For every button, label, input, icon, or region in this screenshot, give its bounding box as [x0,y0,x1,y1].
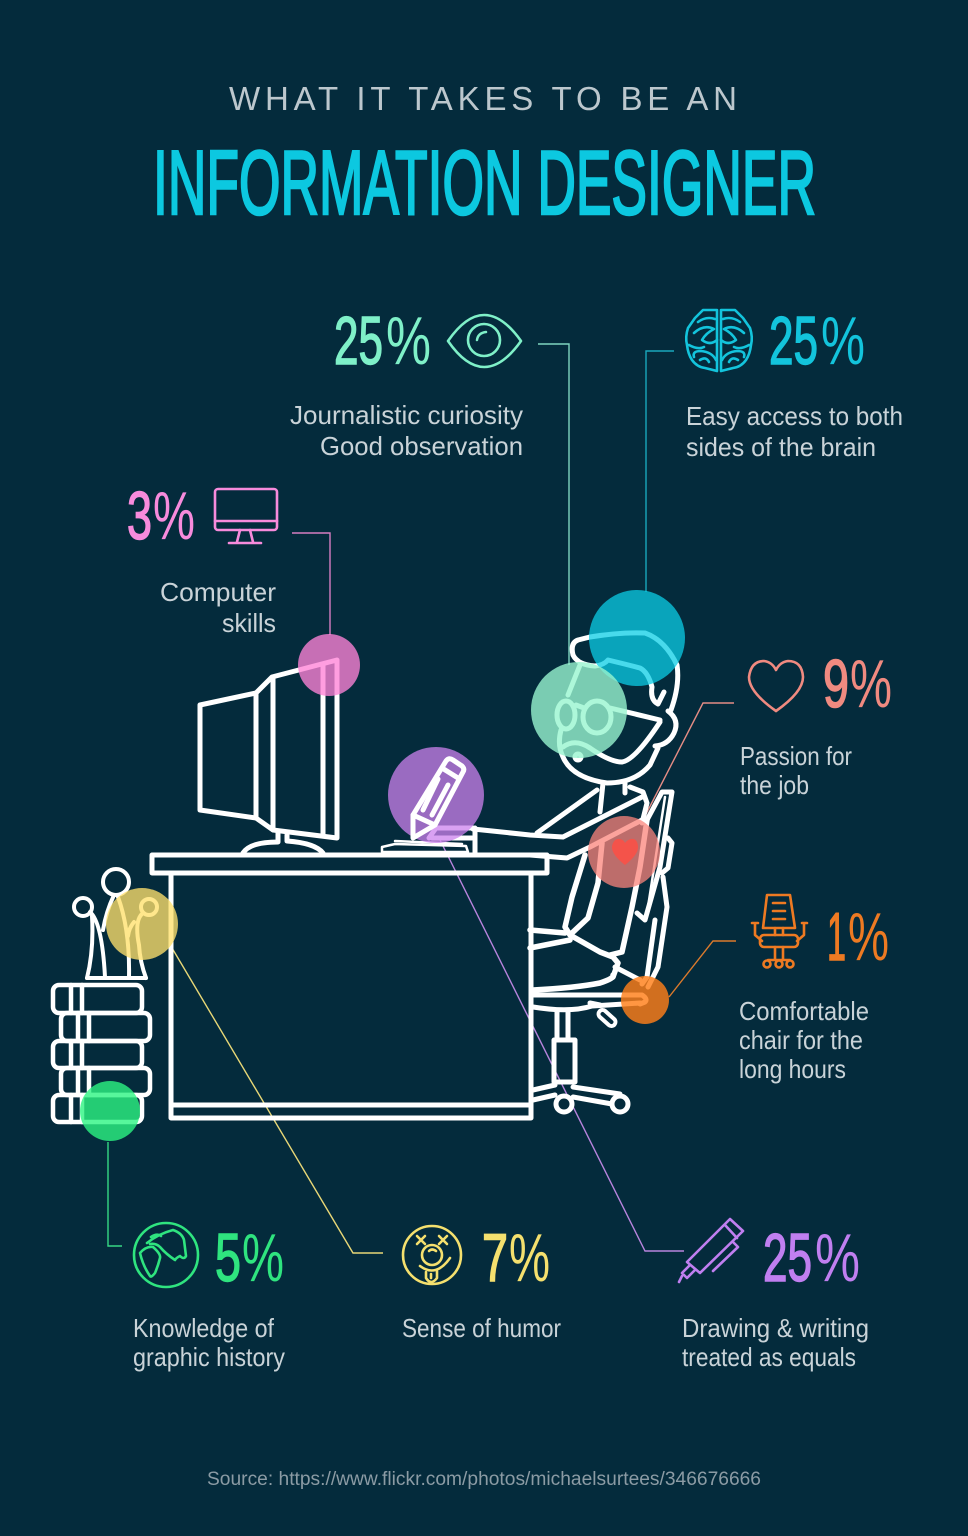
circle: passion [588,816,660,888]
neck [600,783,647,823]
torso [530,820,647,990]
circle: history [80,1081,140,1141]
callout: computer skills: % [153,478,195,554]
callout: graphic history: 5 [215,1220,241,1296]
office chair [533,792,672,1112]
callout: journalistic curiosity: % [386,303,431,379]
hand and arm [429,790,642,858]
icon: red heart [612,839,638,865]
circle: computer [298,634,360,696]
head, hair, glasses [557,633,678,783]
callout: drawing and writing [679,1219,869,1372]
circle: brain [589,590,685,686]
callout: drawing and writing: treated as equals [682,1342,856,1372]
source line: Source: https://www.flickr.com/photos/michaelsurtees/346676666 [207,1469,761,1490]
title line: what it takes: WHAT IT TAKES TO BE AN [229,80,737,117]
callout: computer skills: 3 [127,478,152,554]
icon: eye [448,315,521,367]
callout: graphic history [133,1220,285,1372]
desk [152,855,547,1118]
callout: drawing and writing: 25 [763,1220,812,1296]
callout: both sides of the brain [686,303,903,462]
callout: comfortable chair [739,895,889,1084]
callout: passion for the job: 9 [823,646,849,722]
icon: heart outline [749,661,803,711]
icon: globe [134,1223,198,1287]
circle: eye [531,662,627,758]
callout: both sides of the brain: 25 [769,303,818,379]
keyboard [382,841,468,852]
callout: both sides of the brain: % [821,303,865,379]
callout: comfortable chair: % [848,899,889,975]
callout: graphic history: % [242,1220,284,1296]
callout: journalistic curiosity [290,303,523,461]
callout: passion for the job: Passion for [740,741,852,771]
callout: computer skills [127,478,277,638]
icon: brain [686,310,752,371]
callout: computer skills: Computer [160,577,276,607]
monitor [200,660,337,853]
pen cup [74,869,157,978]
icon: monitor [215,489,277,543]
callout: comfortable chair: 1 [827,899,846,975]
callout: passion for the job [740,646,892,800]
circle: drawing [388,747,484,843]
callout: computer skills: skills [222,608,276,638]
callout: comfortable chair: chair for the [739,1025,863,1055]
callout: both sides of the brain: Easy access to both [686,401,903,431]
leader lines [108,344,736,1253]
callout: journalistic curiosity: Good observation [320,431,523,461]
callout: drawing and writing: Drawing & writing [682,1313,869,1343]
callout: both sides of the brain: sides of the brain [686,432,876,462]
callout: sense of humor: % [509,1220,550,1296]
callout: journalistic curiosity: 25 [334,303,383,379]
callout: journalistic curiosity: Journalistic curiosity [290,400,523,430]
callout: graphic history: Knowledge of [133,1313,275,1343]
callout: drawing and writing: % [815,1220,860,1296]
callout: passion for the job: % [850,646,892,722]
callout: sense of humor: Sense of humor [402,1313,561,1343]
title [153,80,816,234]
icon: chair [752,895,807,968]
circle: chair [621,976,669,1024]
callout: passion for the job: the job [740,770,809,800]
pencil in hand [413,759,464,838]
books [53,985,150,1122]
hotspot circles [80,590,685,1141]
callout: comfortable chair: Comfortable [739,996,869,1026]
icon: marker pen [679,1219,743,1282]
circle: humor [106,888,178,960]
illustration: designer at desk [53,633,678,1122]
callout: comfortable chair: long hours [739,1054,846,1084]
callout: graphic history: graphic history [133,1342,285,1372]
callout: sense of humor [402,1220,561,1343]
callout: sense of humor: 7 [482,1220,508,1296]
icon: silly face [403,1226,461,1284]
